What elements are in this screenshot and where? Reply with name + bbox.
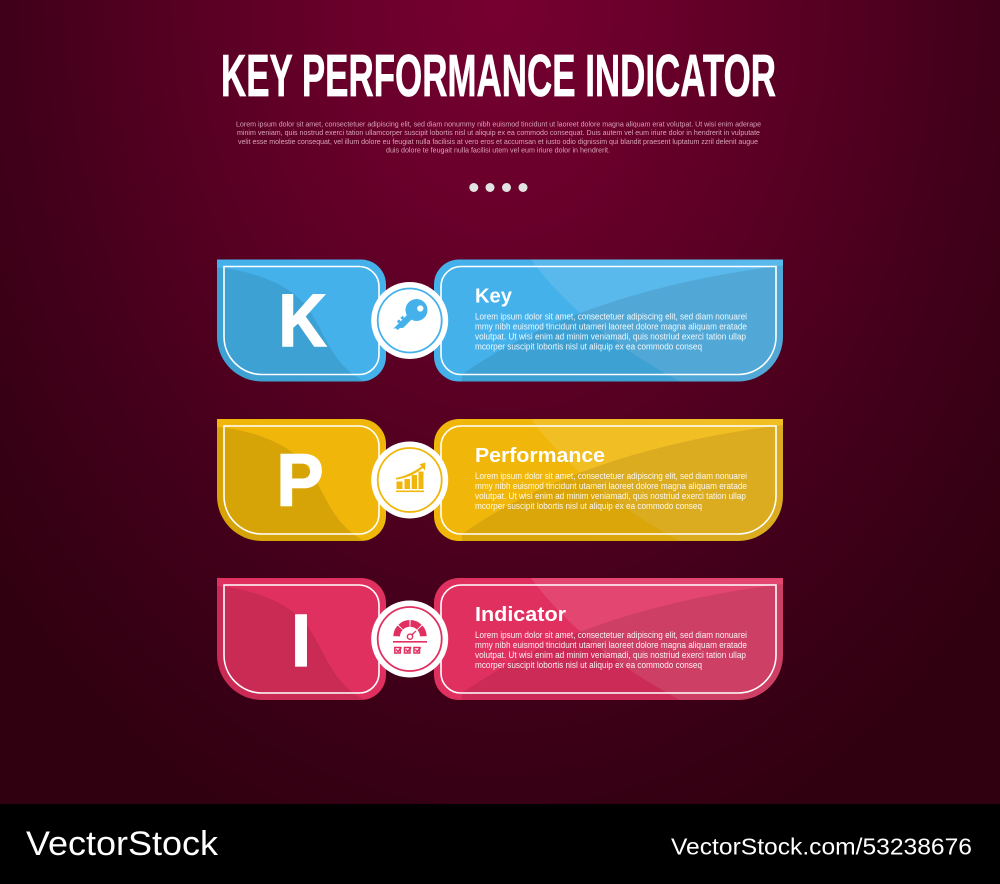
row: P - Performance [217, 419, 783, 549]
panel: Key description [434, 260, 783, 390]
panel: Performance description [434, 419, 783, 549]
panel: letter K: K [278, 279, 326, 362]
panel: letter P: P [276, 438, 324, 522]
panel: Indicator description: Lorem ipsum dolor sit amet, consectetuer adipiscing elit, sed diam nonuarei [475, 630, 747, 640]
panel: Performance description: volutpat. Ut wisi enim ad minim veniamadi, quis nostriud exerci tation ullap [475, 491, 746, 501]
footer bar [0, 804, 1000, 884]
footer logo: VectorStock [26, 825, 219, 863]
intro text block: minim veniam, quis nostrud exerci tation ullamcorper suscipit lobortis nisl ut aliquip ex ea commodo consequat. Duis autem vel eum iriure dolor in hendrerit in vulputate [237, 128, 760, 137]
panel: letter I: I [291, 599, 311, 682]
panel: Key description: mcorper suscipit lobortis nisl ut aliquip ex ea commodo conseq [475, 342, 702, 352]
icon: growth chart in circle [371, 442, 448, 518]
panel: Indicator description [434, 578, 783, 708]
panel: letter K [217, 260, 386, 390]
panel: Performance description: mmy nibh euismod tincidunt utameri laoreet dolore magna aliquam eratade [475, 481, 747, 491]
panel: Key description: mmy nibh euismod tincidunt utameri laoreet dolore magna aliquam eratade [475, 322, 747, 332]
icon: gauge and checklist in circle [371, 600, 448, 678]
panel: Key description: Key [475, 286, 513, 308]
panel: letter P [217, 419, 386, 549]
panel: Indicator description: Indicator [475, 604, 566, 626]
panel: Performance description: Performance [475, 445, 605, 467]
icon: key in circle [371, 282, 448, 359]
panel: Performance description: Lorem ipsum dolor sit amet, consectetuer adipiscing elit, sed diam nonuarei [475, 471, 747, 481]
intro text block: duis dolore te feugait nulla facilisi utem vel eum iriure dolor in hendrerit. [386, 146, 610, 154]
pagination dots [469, 183, 528, 192]
panel: Key description: Lorem ipsum dolor sit amet, consectetuer adipiscing elit, sed diam nonuarei [475, 312, 747, 322]
row: K - Key [217, 260, 783, 390]
panel: Indicator description: volutpat. Ut wisi enim ad minim veniamadi, quis nostriud exerci tation ullap [475, 650, 746, 660]
row: I - Indicator [217, 578, 783, 708]
panel: Performance description: mcorper suscipit lobortis nisl ut aliquip ex ea commodo conseq [475, 501, 702, 511]
panel: letter I [217, 578, 386, 708]
intro text block [236, 120, 761, 154]
panel: Key description: volutpat. Ut wisi enim ad minim veniamadi, quis nostriud exerci tation ullap [475, 332, 746, 342]
footer image id: VectorStock.com/53238676 [671, 834, 972, 860]
intro text block: Lorem ipsum dolor sit amet, consectetuer adipiscing elit, sed diam nonummy nibh euismod tincidunt ut laoreet dolore magna aliquam erat volutpat. Ut wisi enim aderape [236, 120, 761, 128]
intro text block: velit esse molestie consequat, vel illum dolore eu feugiat nulla facilisis at vero eros et accumsan et iusto odio dignissim qui blandit praesent luptatum zzril delenit augue [238, 137, 758, 146]
panel: Indicator description: mcorper suscipit lobortis nisl ut aliquip ex ea commodo conseq [475, 660, 702, 670]
panel: Indicator description: mmy nibh euismod tincidunt utameri laoreet dolore magna aliquam eratade [475, 640, 747, 650]
